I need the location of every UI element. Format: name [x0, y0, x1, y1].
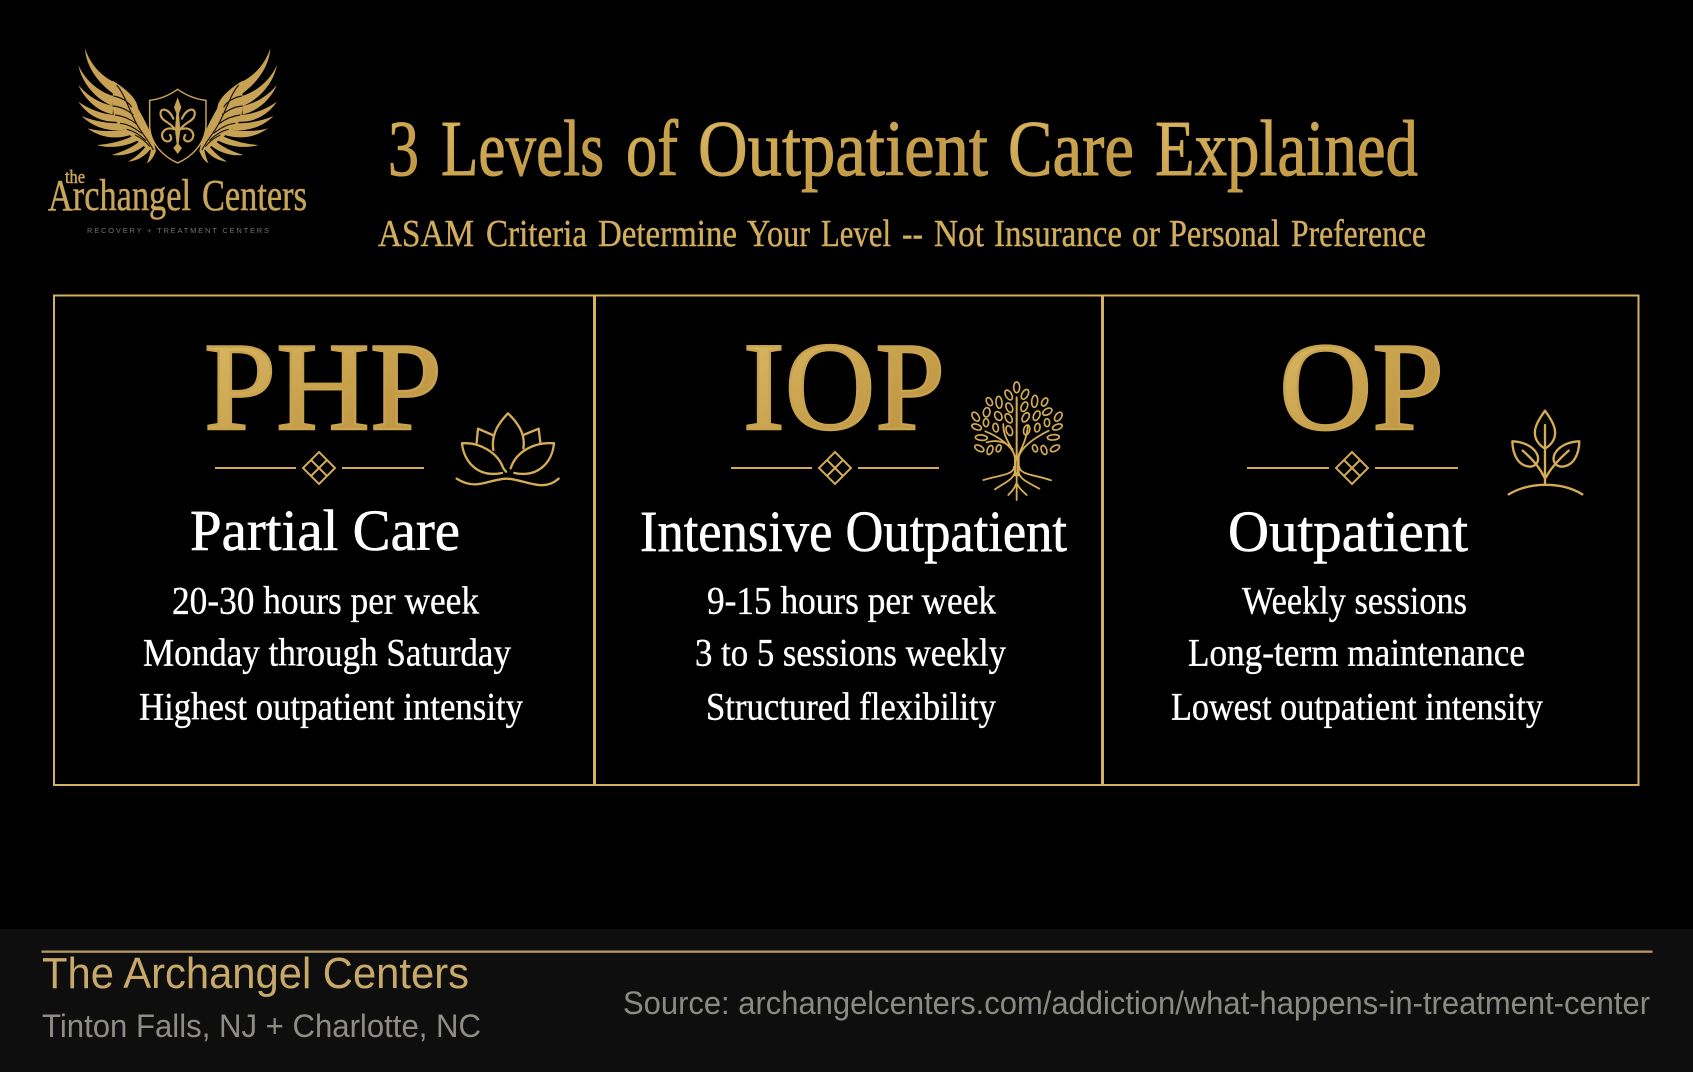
logo wordmark [48, 167, 307, 220]
subtitle: Preference [1291, 213, 1426, 255]
panel: OP [1171, 318, 1582, 728]
ornament divider [731, 452, 939, 484]
IOP abbreviation: IOP [743, 318, 945, 457]
icon: winged shield [78, 48, 277, 163]
subtitle: Not [934, 213, 984, 255]
title: of [626, 106, 679, 193]
ornament divider [1247, 452, 1458, 484]
locations: Tinton Falls, NJ + Charlotte, NC [42, 1008, 481, 1044]
details: Long-term maintenance [1188, 632, 1525, 674]
subheading: Outpatient [1228, 499, 1468, 564]
logo wordmark: Centers [202, 171, 307, 220]
source: Source: archangelcenters.com/addiction/what-happens-in-treatment-center [623, 985, 1650, 1021]
icon: lotus [457, 413, 559, 485]
logo wordmark: Archangel [48, 171, 191, 220]
subtitle: Personal [1169, 213, 1280, 255]
footer [0, 929, 1693, 1072]
details [139, 580, 523, 728]
OP abbreviation: OP [1279, 318, 1444, 457]
subtitle: Your [747, 213, 810, 255]
PHP abbreviation: PHP [204, 318, 442, 457]
subtitle: Determine [598, 213, 737, 255]
organization name: The Archangel Centers [42, 949, 469, 998]
details [695, 580, 1006, 728]
title: Outpatient [698, 106, 988, 193]
title [388, 106, 1418, 193]
logo: The Archangel Centers [48, 48, 307, 235]
title: Explained [1155, 106, 1418, 193]
title: Levels [441, 106, 604, 193]
frame: three-column table [54, 295, 1638, 785]
details: Highest outpatient intensity [139, 686, 523, 728]
details: Weekly sessions [1242, 580, 1467, 622]
left wing [78, 48, 156, 163]
icon: tree [970, 382, 1064, 500]
subtitle: Insurance [994, 213, 1122, 255]
footer rule [42, 950, 1652, 953]
details [1171, 580, 1543, 728]
subtitle: ASAM [378, 213, 474, 255]
subtitle [378, 213, 1426, 255]
icon: sprout [1509, 411, 1582, 494]
subtitle: or [1132, 213, 1160, 255]
details: 20-30 hours per week [172, 580, 479, 622]
panel: IOP [640, 318, 1067, 728]
ornament divider [215, 452, 424, 484]
details: Monday through Saturday [143, 632, 511, 674]
title: 3 [388, 106, 419, 193]
subtitle: -- [902, 213, 923, 255]
details: Lowest outpatient intensity [1171, 686, 1543, 728]
title: Care [1008, 106, 1134, 193]
subheading: Intensive Outpatient [640, 499, 1067, 564]
subheading: Partial Care [190, 498, 460, 563]
details: 9-15 hours per week [707, 580, 996, 622]
panel: PHP [139, 318, 559, 728]
shield [150, 89, 206, 163]
logo tagline: RECOVERY + TREATMENT CENTERS [87, 226, 269, 235]
footer background [0, 929, 1693, 1072]
details: 3 to 5 sessions weekly [695, 632, 1006, 674]
logo wordmark: the [65, 167, 85, 188]
details: Structured flexibility [706, 686, 996, 728]
subtitle: Criteria [486, 213, 587, 255]
subtitle: Level [821, 213, 891, 255]
right wing [199, 48, 277, 163]
